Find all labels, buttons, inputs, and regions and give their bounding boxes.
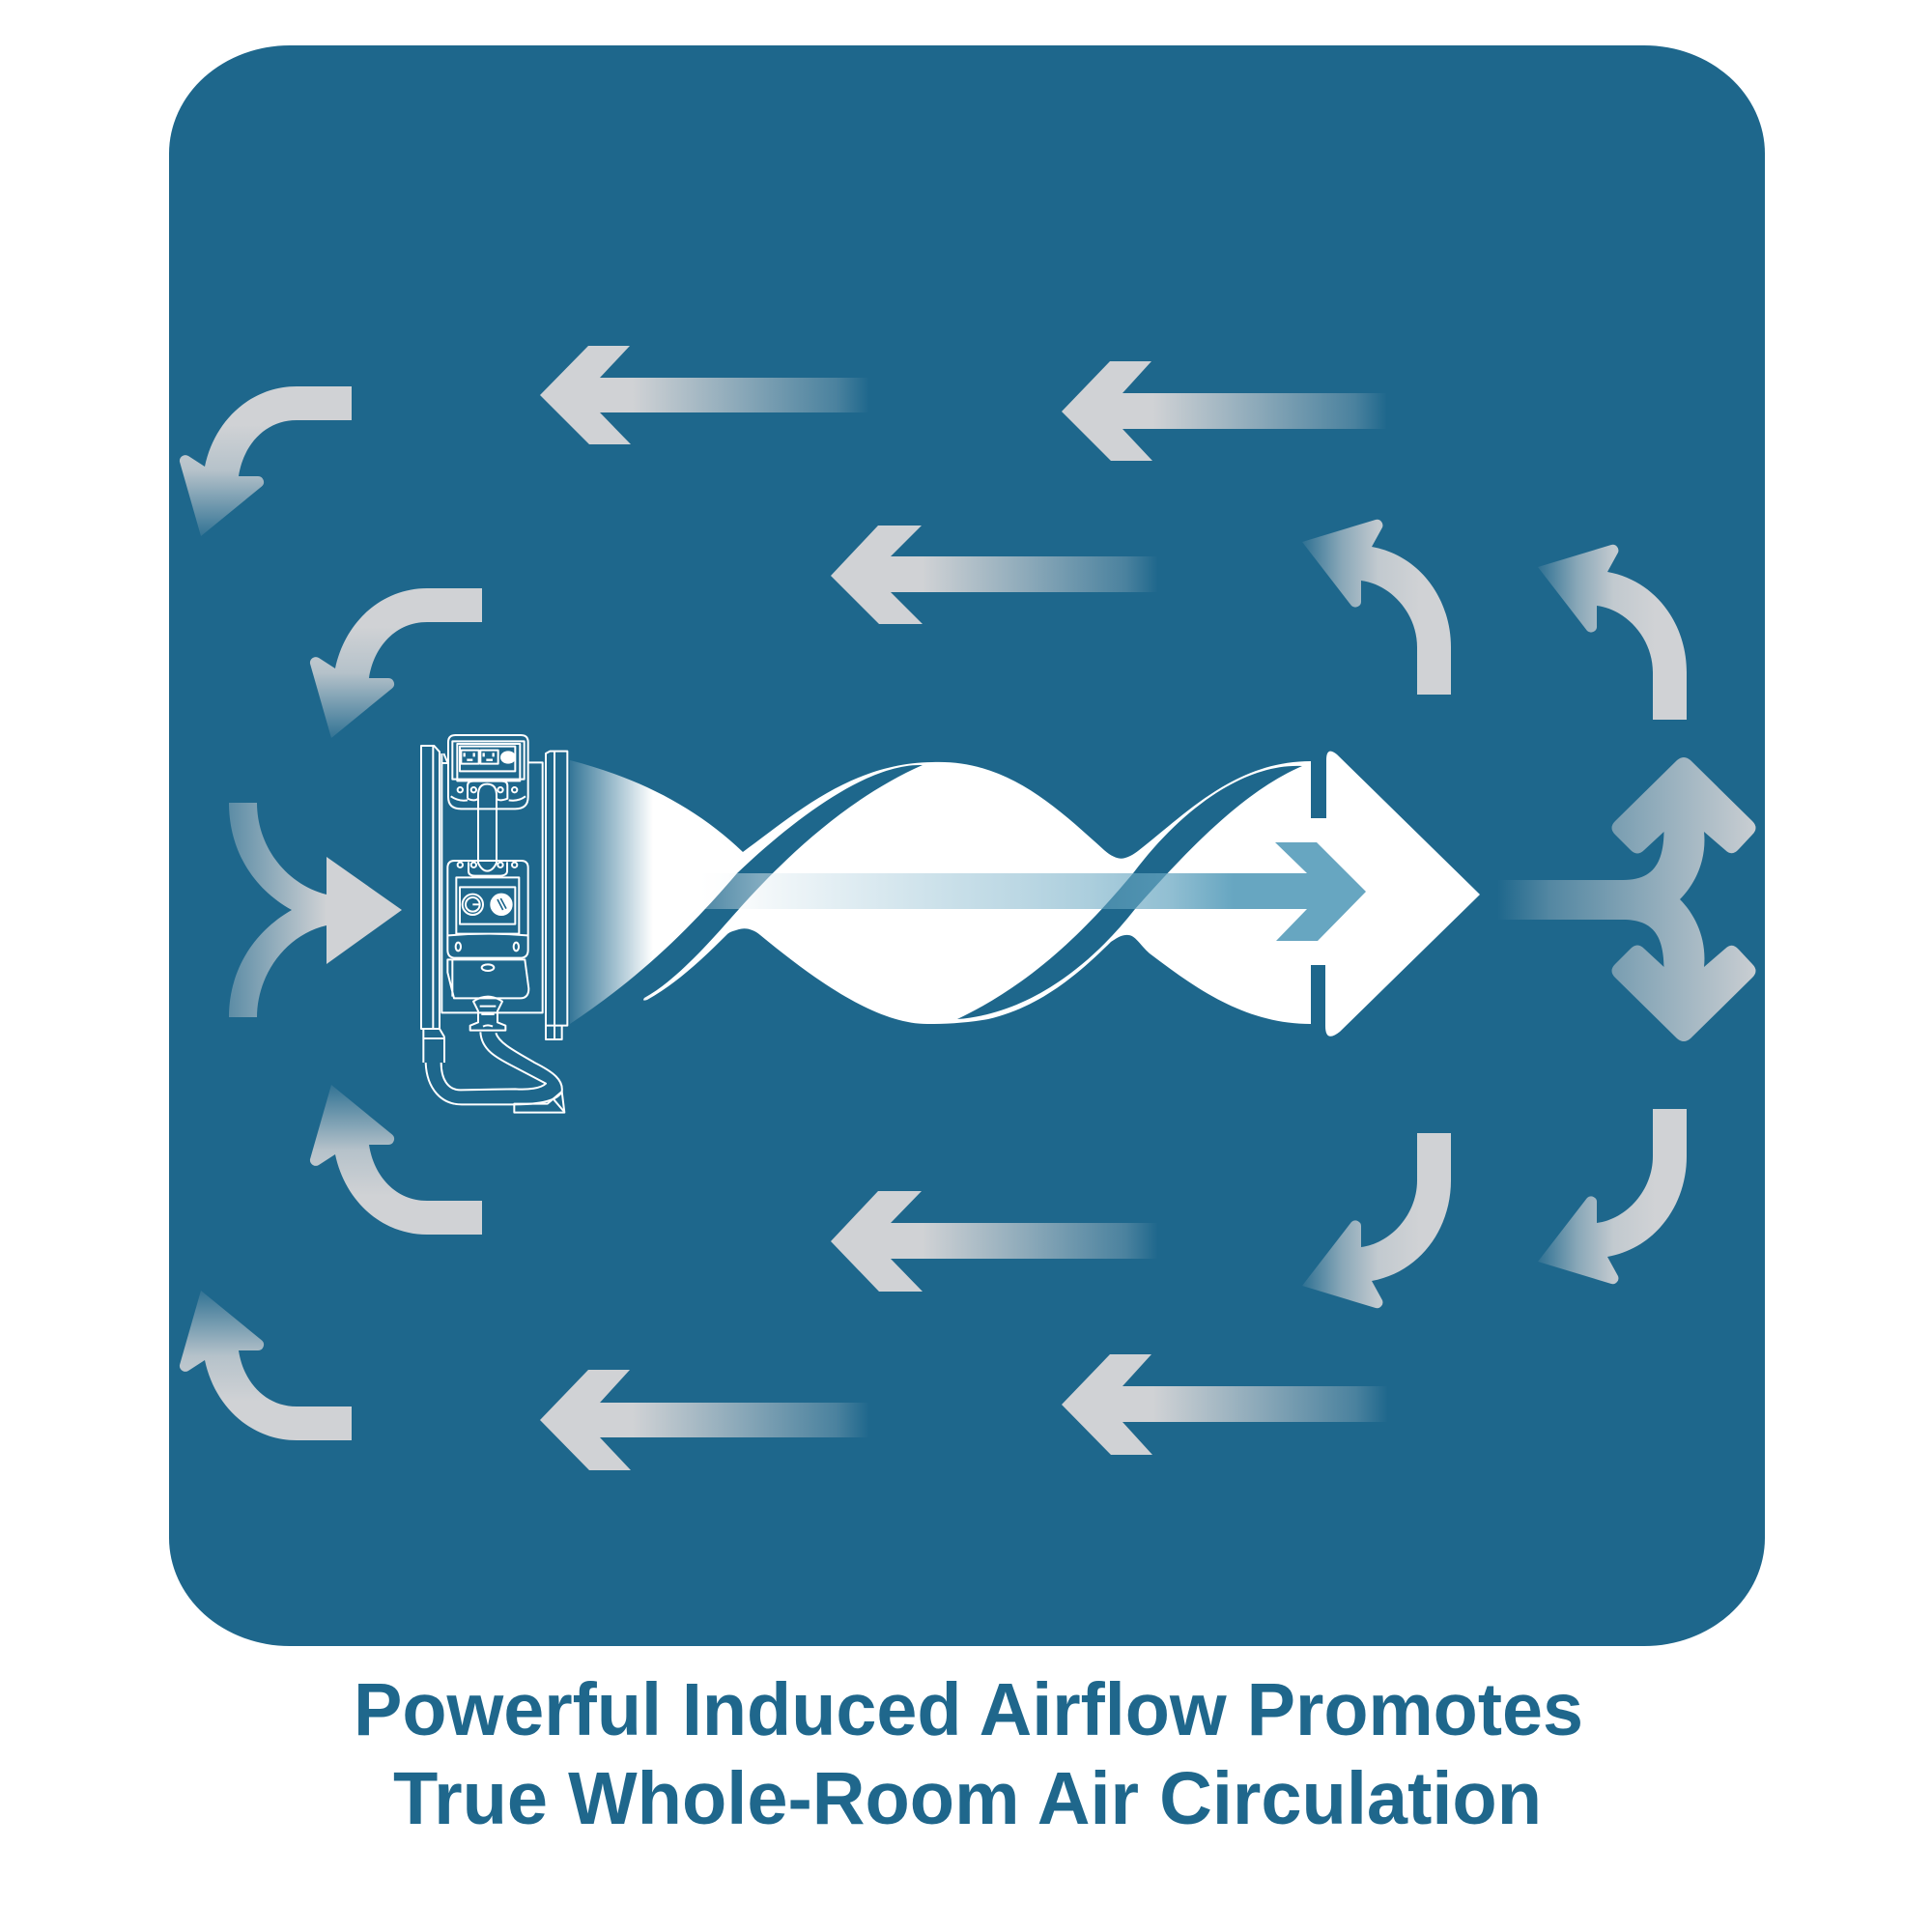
- cord clamp: [470, 997, 505, 1031]
- arrow: top row left straight arrow: [540, 346, 869, 444]
- arrow: curved upper inner left: [310, 588, 482, 738]
- arrow: top row right straight arrow: [1062, 361, 1387, 461]
- arrow: central light blue direction arrow: [698, 842, 1366, 941]
- arrow: bottom row right straight arrow: [1062, 1354, 1388, 1455]
- arrow: curved upper outer left: [180, 386, 352, 536]
- arrow: curved lower inner right: [1302, 1133, 1451, 1308]
- top control box: [448, 735, 528, 809]
- title line one: Powerful Induced Airflow Promotes: [354, 1668, 1583, 1751]
- lower control box: [447, 861, 528, 958]
- airflow twist: white spiral stream with big arrow head: [570, 752, 1480, 1037]
- mounting screws top: [458, 787, 517, 792]
- handle: [478, 784, 497, 871]
- top handle bracket: [468, 781, 507, 800]
- power dial: [463, 895, 483, 915]
- power cord: [426, 1032, 562, 1104]
- arrow: right split arrow up and down: [1497, 757, 1756, 1041]
- title line two: True Whole-Room Air Circulation: [393, 1757, 1542, 1840]
- left rail: [421, 746, 444, 1063]
- arrow: second row straight arrow: [831, 526, 1158, 624]
- cord plug: [514, 1092, 564, 1113]
- arrow: curved upper outer right: [1538, 545, 1687, 720]
- arrow: curved lower outer right: [1538, 1109, 1687, 1284]
- right rail: [546, 752, 567, 1039]
- lower screws: [456, 863, 519, 951]
- base badge: [482, 964, 494, 971]
- arrow: left intake merge arrow: [229, 803, 402, 1017]
- panel: blue room background: [169, 45, 1765, 1646]
- arrow: curved lower outer left: [180, 1291, 352, 1440]
- device: fan unit line drawing: [421, 735, 567, 1113]
- back plate: [441, 753, 543, 1012]
- speed dial: [491, 895, 512, 915]
- arrow: curved lower inner left: [310, 1085, 482, 1235]
- motor base: [447, 959, 528, 998]
- switch panel: [460, 887, 515, 924]
- arrow: lower second row straight arrow: [831, 1191, 1158, 1292]
- arrow: bottom row left straight arrow: [540, 1370, 869, 1470]
- outlet panel: [460, 747, 515, 771]
- arrow: curved upper inner right: [1302, 520, 1451, 695]
